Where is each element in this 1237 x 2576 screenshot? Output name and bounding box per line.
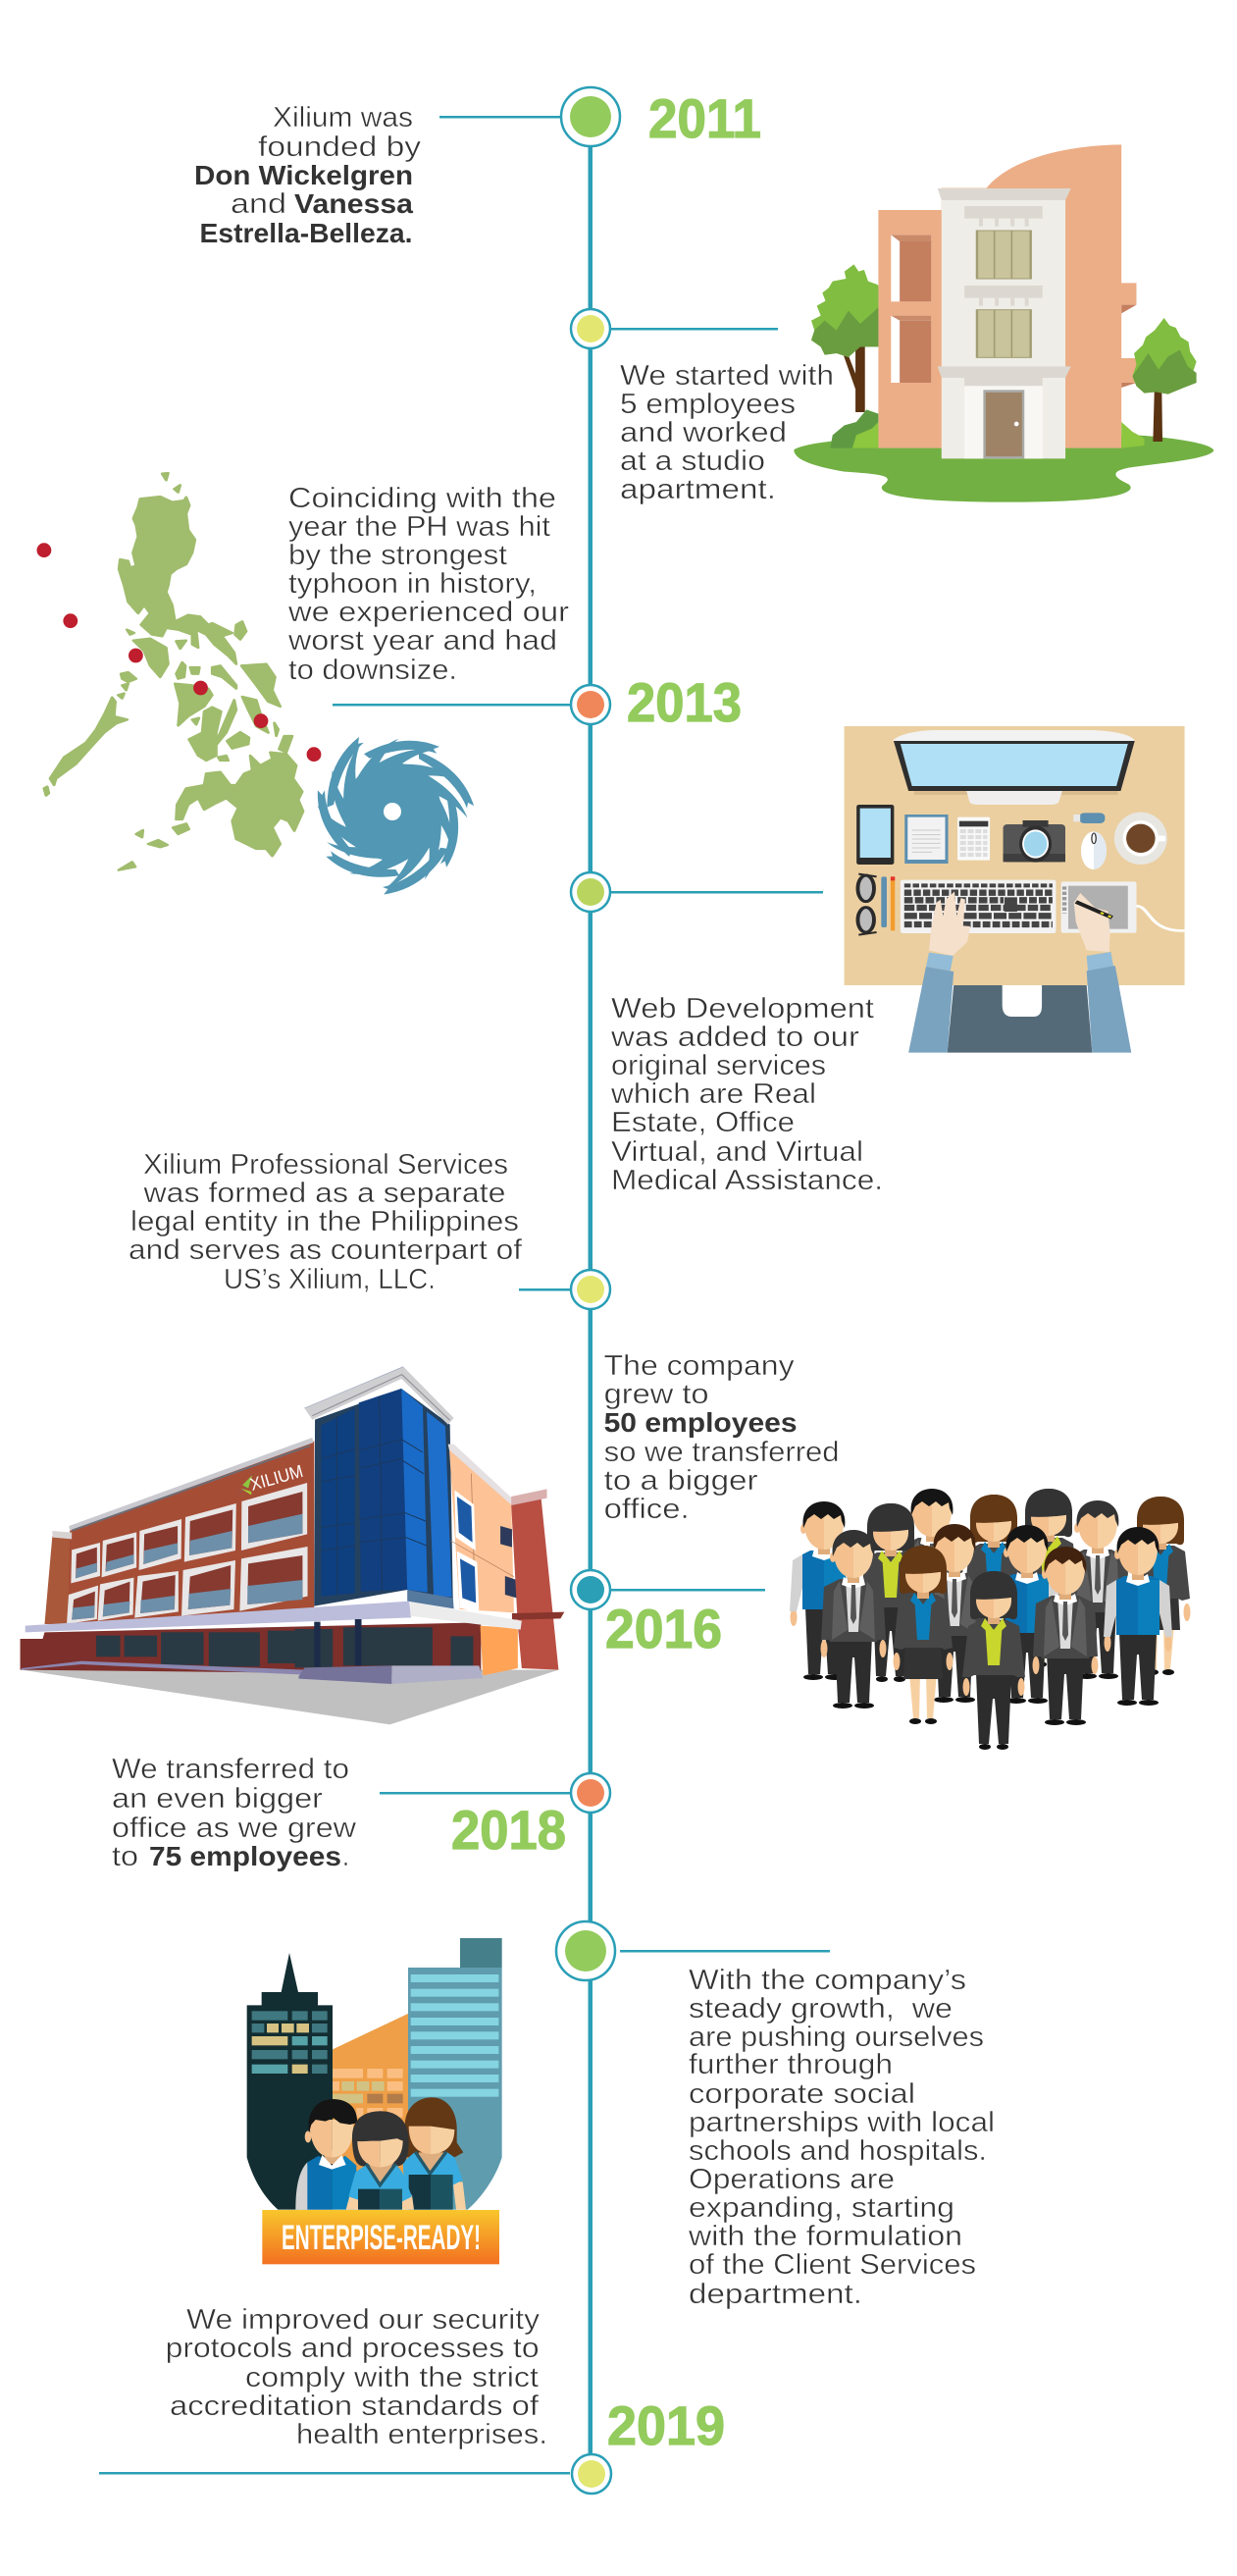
text: web development: original services bbox=[611, 1050, 826, 1081]
text: founders: founded by bbox=[258, 131, 422, 163]
year 2016: 2016 bbox=[605, 1598, 722, 1659]
text: professional services: and serves as counterpart of bbox=[129, 1235, 523, 1266]
node: five employees bbox=[571, 309, 610, 348]
year 2011: 2011 bbox=[648, 87, 761, 149]
text: typhoon year: to downsize. bbox=[288, 655, 457, 686]
text: web development: was added to our bbox=[610, 1022, 859, 1053]
node 2011 bbox=[561, 87, 620, 146]
node: web development bbox=[571, 872, 610, 912]
connector lines bbox=[99, 116, 830, 2475]
text: professional services bbox=[129, 1149, 523, 1295]
text: steady growth: partnerships with local bbox=[689, 2107, 995, 2138]
illustration: Xilium office building bbox=[21, 1367, 564, 1724]
text: professional services: US’s Xilium, LLC. bbox=[224, 1264, 436, 1295]
text: typhoon year bbox=[287, 483, 569, 686]
text: security protocols: protocols and processes to bbox=[166, 2333, 540, 2364]
text: steady growth: are pushing ourselves bbox=[689, 2022, 984, 2053]
text: five employees: at a studio bbox=[620, 446, 765, 477]
text: typhoon year: worst year and had bbox=[287, 625, 557, 657]
text: steady growth: Operations are bbox=[689, 2164, 895, 2195]
node 2016 bbox=[571, 1570, 610, 1609]
illustration: team of employees bbox=[790, 1489, 1191, 1750]
text: fifty employees: so we transferred bbox=[604, 1437, 840, 1468]
year 2013: 2013 bbox=[627, 671, 742, 733]
text: fifty employees: The company bbox=[604, 1350, 795, 1382]
text: steady growth: further through bbox=[689, 2049, 893, 2080]
text: five employees: apartment. bbox=[620, 474, 776, 505]
text: founders: and bbox=[231, 188, 286, 220]
banner label: ENTERPISE-READY! bbox=[282, 2219, 481, 2257]
text: seventy-five employees: 75 employees bbox=[149, 1841, 341, 1871]
text: steady growth: With the company’s bbox=[689, 1965, 966, 1996]
text: steady growth: department. bbox=[689, 2279, 862, 2310]
text: web development: Estate, Office bbox=[611, 1107, 795, 1138]
text: typhoon year: we experienced our bbox=[287, 597, 569, 628]
text: security protocols: accreditation standards of bbox=[170, 2391, 540, 2422]
text: typhoon year: by the strongest bbox=[288, 540, 507, 571]
building sign: XILIUM bbox=[248, 1461, 305, 1495]
text: web development: Medical Assistance. bbox=[611, 1165, 883, 1196]
node 2018 bbox=[571, 1773, 610, 1813]
text: steady growth: corporate social bbox=[689, 2078, 915, 2110]
text: steady growth: schools and hospitals. bbox=[689, 2135, 987, 2167]
text: five employees bbox=[620, 360, 834, 505]
text: steady growth: of the Client Services bbox=[689, 2249, 976, 2281]
text: web development: Web Development bbox=[611, 993, 874, 1025]
text: professional services: Xilium Professional Services bbox=[143, 1149, 508, 1181]
text: web development bbox=[610, 993, 883, 1196]
text: fifty employees: 50 employees bbox=[604, 1407, 798, 1438]
text: web development: Virtual, and Virtual bbox=[611, 1136, 863, 1168]
text: security protocols: health enterprises. bbox=[296, 2419, 547, 2450]
node: professional services bbox=[571, 1270, 610, 1309]
text: seventy-five employees: office as we grew bbox=[112, 1813, 357, 1844]
year 2018: 2018 bbox=[451, 1799, 566, 1861]
timeline spine bbox=[589, 117, 593, 2474]
text: steady growth: expanding, starting bbox=[689, 2192, 954, 2224]
illustration: Philippine map bbox=[44, 473, 303, 870]
text: fifty employees: office. bbox=[604, 1494, 690, 1525]
text: founders: Vanessa bbox=[294, 188, 413, 219]
text: fifty employees: to a bigger bbox=[604, 1465, 758, 1497]
text: steady growth bbox=[688, 1965, 995, 2310]
text: seventy-five employees bbox=[112, 1754, 357, 1872]
text: professional services: legal entity in the Philippines bbox=[130, 1206, 519, 1237]
text: security protocols: We improved our security bbox=[186, 2304, 541, 2336]
text: fifty employees bbox=[604, 1350, 840, 1525]
text: steady growth: steady growth, we bbox=[689, 1993, 953, 2024]
node 2013 bbox=[571, 685, 610, 724]
text: typhoon year: year the PH was hit bbox=[288, 511, 550, 543]
text: founders: Estrella-Belleza. bbox=[200, 218, 412, 248]
node 2019 bbox=[572, 2454, 611, 2494]
text: seventy-five employees: an even bigger bbox=[112, 1783, 323, 1814]
text: founders: Xilium was bbox=[273, 102, 413, 133]
text: founders: Don Wickelgren bbox=[194, 160, 413, 190]
text: seventy-five employees: to bbox=[112, 1841, 138, 1872]
icon: typhoon bbox=[312, 735, 477, 898]
text: web development: which are Real bbox=[610, 1078, 816, 1110]
text: professional services: was formed as a separate bbox=[142, 1178, 506, 1209]
year 2019: 2019 bbox=[607, 2394, 725, 2456]
text: five employees: and worked bbox=[620, 417, 787, 448]
text: steady growth: with the formulation bbox=[688, 2221, 962, 2252]
text: seventy-five employees: We transferred to bbox=[112, 1754, 349, 1785]
node: steady growth bbox=[556, 1921, 615, 1980]
text: typhoon year: Coinciding with the bbox=[288, 483, 556, 514]
text: security protocols: comply with the strict bbox=[245, 2362, 539, 2393]
illustration: apartment building bbox=[794, 144, 1213, 502]
text: security protocols bbox=[166, 2304, 547, 2450]
map markers bbox=[37, 543, 321, 762]
text: five employees: We started with bbox=[620, 360, 834, 392]
illustration: enterprise-ready team bbox=[247, 1938, 502, 2264]
text: fifty employees: grew to bbox=[604, 1379, 709, 1410]
illustration: developer desk bbox=[845, 726, 1185, 1053]
text: typhoon year: typhoon in history, bbox=[288, 568, 537, 600]
text: founders bbox=[194, 102, 422, 248]
text: seventy-five employees: . bbox=[342, 1841, 349, 1872]
text: five employees: 5 employees bbox=[620, 389, 796, 420]
